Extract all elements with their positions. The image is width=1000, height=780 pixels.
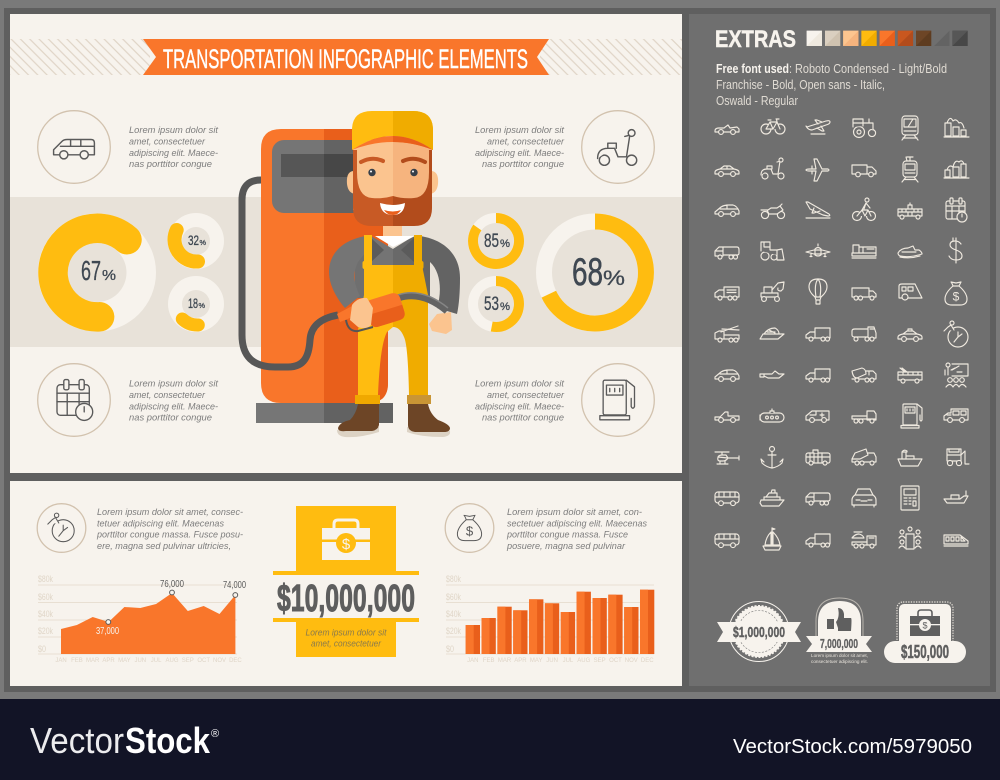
bar chart: SEP xyxy=(594,658,606,664)
bar chart: JUN xyxy=(546,658,558,664)
bar chart: $20k xyxy=(446,626,461,636)
text: chart intro right: posuere, magna sed pulvinar xyxy=(506,541,626,551)
icon: fuel pump in circle xyxy=(582,364,654,436)
shirt and arms xyxy=(329,236,460,314)
icon: van in circle xyxy=(38,111,110,183)
panel: bottom charts xyxy=(10,481,682,686)
logo: VectorStock: Stock xyxy=(125,720,211,761)
text: bottom left lorem: nas porttitor congue xyxy=(129,412,212,422)
icon: fuel pump xyxy=(901,404,922,428)
text: top left lorem: nas porttitor congue xyxy=(129,159,212,169)
badge: 7,000,000 thumbs up: 7,000,000 xyxy=(820,636,858,651)
icon: chart up xyxy=(944,161,969,178)
area chart: $60k xyxy=(38,592,53,602)
area chart: $0 xyxy=(38,644,46,654)
area chart: 37,000 xyxy=(96,626,119,637)
bar chart: JUL xyxy=(563,658,574,664)
icon: jet ski xyxy=(898,246,922,258)
area chart: 74,000 xyxy=(223,580,246,591)
icon: semi truck xyxy=(806,328,830,341)
icon: calendar in circle xyxy=(38,364,110,436)
text: top right lorem: nas porttitor congue xyxy=(482,159,564,169)
icon: car front xyxy=(852,489,876,507)
colour swatches xyxy=(807,31,968,46)
icon: bus xyxy=(715,492,739,506)
area chart: $20k xyxy=(38,626,53,636)
text: bottom right lorem: nas porttitor congue xyxy=(482,412,564,422)
text: bottom right lorem: amet, consectetuer xyxy=(487,390,565,400)
icon: plane take-off xyxy=(806,120,830,134)
text: callout lorem xyxy=(306,628,387,648)
area chart: JUN xyxy=(134,658,146,664)
text: chart intro left xyxy=(96,507,243,551)
illustration: gas station attendant xyxy=(329,111,460,437)
text: top left lorem xyxy=(129,125,218,169)
text: chart intro left: ere, magna sed pulvinar ultricies, xyxy=(97,541,231,551)
icon: coach xyxy=(715,534,739,548)
text: chart intro right: porttitor congue massa. Fusce xyxy=(506,530,628,540)
area chart xyxy=(38,574,246,664)
text: bottom left lorem: Lorem ipsum dolor sit xyxy=(129,378,218,388)
text: badge caption: consectetuer adipiscing elit. xyxy=(811,659,868,664)
panel: main transportation poster xyxy=(10,14,682,473)
icon: scooter xyxy=(761,158,784,179)
icon: locomotive xyxy=(852,245,876,258)
area chart: $80k xyxy=(38,574,53,584)
icon: taxi xyxy=(898,329,922,341)
icon: tanker truck xyxy=(715,247,739,259)
badge: $150,000 briefcase: $ xyxy=(922,620,928,630)
overalls xyxy=(355,235,431,404)
bar chart: OCT xyxy=(609,658,622,664)
panel: extras xyxy=(689,14,990,686)
text: bottom right lorem: adipiscing elit. Maece- xyxy=(475,402,564,412)
text: top left lorem: amet, consectetuer xyxy=(129,136,206,146)
icon: dollar xyxy=(949,238,962,263)
bar chart: NOV xyxy=(625,658,638,664)
icon: cruise ship xyxy=(760,490,784,506)
area chart: DEC xyxy=(229,658,242,664)
icon: minivan xyxy=(715,370,739,381)
area chart: JAN xyxy=(55,658,67,664)
icon: city bus xyxy=(898,203,922,219)
donut: 85%: % xyxy=(500,238,510,250)
icon: money bag xyxy=(945,282,967,305)
icon: motorbike xyxy=(761,204,785,219)
logo: VectorStock: ® xyxy=(211,728,219,740)
icon: running clock in circle xyxy=(37,504,86,552)
donut: 32%: 32 xyxy=(188,232,199,248)
text: bottom left lorem: adipiscing elit. Maece- xyxy=(129,402,218,412)
icon: tram xyxy=(902,157,918,182)
donut: 68%: 68 xyxy=(572,251,603,294)
icon: convertible xyxy=(715,125,739,134)
icon: briefcase: $ xyxy=(342,536,351,553)
footer bar xyxy=(0,699,1000,780)
badge: $150,000 briefcase xyxy=(884,602,966,663)
icon: running clock xyxy=(944,321,968,347)
donut: 67% xyxy=(38,214,156,332)
donut: 68% xyxy=(544,222,646,324)
icon: flatbed xyxy=(852,411,876,423)
icon: helicopter xyxy=(715,452,739,464)
text: fonts used xyxy=(716,62,947,108)
bar chart: FEB xyxy=(483,658,495,664)
text: chart intro left: porttitor congue massa. Fusce posu- xyxy=(96,530,243,540)
donut: 53%: % xyxy=(500,301,510,313)
icon: container truck xyxy=(806,369,830,382)
text: fonts used: Franchise - Bold, Open sans - Italic, xyxy=(716,78,885,92)
icon: meeting xyxy=(899,527,921,549)
text: chart intro right: Lorem ipsum dolor sit amet, con- xyxy=(507,507,642,517)
icon: hot air balloon xyxy=(809,279,827,304)
text: chart intro right: sectetuer adipiscing elit. Maecenas xyxy=(507,518,647,528)
icon: bicycle xyxy=(761,119,785,134)
area chart: SEP xyxy=(182,658,194,664)
icon: yacht xyxy=(760,328,784,339)
icon: car carrier xyxy=(852,532,876,548)
heading: extras: EXTRAS xyxy=(715,26,796,53)
bar chart xyxy=(446,574,654,664)
icon: forklift xyxy=(947,449,969,466)
icon: caravan xyxy=(899,284,922,300)
text: badge caption: Lorem ipsum dolor sit amet, xyxy=(811,653,868,658)
text: chart intro left: tetuer adipiscing elit. Maecenas xyxy=(97,518,224,528)
donut: 67%: % xyxy=(102,267,116,284)
bar chart: $40k xyxy=(446,609,461,619)
bar chart: $80k xyxy=(446,574,461,584)
icon: tank truck xyxy=(852,327,876,341)
badge: $150,000 briefcase: $150,000 xyxy=(901,642,949,662)
text: bottom left lorem: amet, consectetuer xyxy=(129,390,206,400)
bar chart: APR xyxy=(514,658,527,664)
donut: 18% xyxy=(168,276,224,332)
text: bottom right lorem: Lorem ipsum dolor sit xyxy=(475,378,564,388)
icon: cargo ship xyxy=(898,450,922,466)
donut: 85% xyxy=(473,218,519,264)
icon: cyclist xyxy=(852,198,876,220)
icon: submarine xyxy=(760,409,784,422)
donut: 32% xyxy=(168,213,224,269)
text: fonts used: : Roboto Condensed - Light/Bold xyxy=(789,62,947,76)
text: top right lorem xyxy=(475,125,565,169)
donut: 53%: 53 xyxy=(484,293,499,315)
text: top right lorem: adipiscing elit. Maece- xyxy=(475,148,564,158)
icon: ambulance xyxy=(806,411,829,422)
bar chart: MAR xyxy=(498,658,512,664)
text: chart intro left: Lorem ipsum dolor sit amet, consec- xyxy=(97,507,243,517)
text: top right lorem: amet, consectetuer xyxy=(487,136,565,146)
bar chart: DEC xyxy=(641,658,654,664)
icon: fire truck xyxy=(715,326,739,342)
icon: ferry xyxy=(944,491,968,503)
icon: calendar xyxy=(946,198,967,222)
bar chart: JAN xyxy=(467,658,478,664)
text: fonts used: Free font used xyxy=(716,62,789,76)
icon: box truck xyxy=(715,287,739,300)
icon: bullet train xyxy=(944,535,968,546)
icon: truck xyxy=(806,534,830,547)
text: bottom left lorem xyxy=(129,378,218,422)
icon: motorhome xyxy=(944,409,968,422)
text: badge caption xyxy=(811,653,868,664)
icon: bulldozer xyxy=(761,242,784,260)
area chart: JUL xyxy=(151,658,162,664)
icon: scooter in circle xyxy=(582,111,654,183)
area chart: OCT xyxy=(197,658,210,664)
area chart: NOV xyxy=(213,658,226,664)
donut: 85%: 85 xyxy=(484,230,499,252)
icon: sailboat xyxy=(763,528,781,550)
icon: briefcase xyxy=(322,520,370,560)
bar chart: $60k xyxy=(446,592,461,602)
hatch pattern left and right of banner xyxy=(10,39,682,75)
icon grid: transport line icons xyxy=(715,116,969,550)
icon: chart down xyxy=(944,118,969,137)
badge: 7,000,000 thumbs up xyxy=(806,598,872,664)
callout: $10,000,000 xyxy=(273,506,419,657)
area chart: FEB xyxy=(71,658,83,664)
donut: 68%: % xyxy=(603,267,625,290)
icon: delivery van xyxy=(852,165,876,177)
icon: calculator xyxy=(901,486,919,510)
area chart: $40k xyxy=(38,609,53,619)
icon: plane top view xyxy=(806,159,829,181)
nozzle and hands xyxy=(337,291,452,334)
boots xyxy=(337,404,450,437)
icon: plane front xyxy=(806,244,830,256)
donut: 53% xyxy=(473,281,519,327)
text: top left lorem: Lorem ipsum dolor sit xyxy=(129,125,218,135)
icon: fire bus xyxy=(806,450,830,465)
donut: 32%: % xyxy=(200,238,206,247)
donut: 18%: % xyxy=(198,301,205,310)
icon: train front xyxy=(902,116,918,140)
badge: $1,000,000: $1,000,000 xyxy=(733,625,785,641)
icon: cement mixer xyxy=(852,368,876,382)
band behind donuts xyxy=(10,197,682,347)
icon: presentation xyxy=(945,363,968,387)
icon: excavator xyxy=(761,282,784,301)
text: fonts used: Oswald - Regular xyxy=(716,94,798,108)
area chart: MAY xyxy=(118,658,131,664)
icon: plane landing xyxy=(806,202,830,218)
area chart: MAR xyxy=(86,658,100,664)
text: top right lorem: Lorem ipsum dolor sit xyxy=(475,125,564,135)
icon: pickup xyxy=(715,412,739,422)
area chart: APR xyxy=(102,658,115,664)
bar chart: MAY xyxy=(530,658,542,664)
callout: $10,000,000: $10,000,000 xyxy=(277,578,415,620)
text: bottom right lorem xyxy=(475,378,565,422)
icon: van xyxy=(715,205,739,216)
icon: trolley bus xyxy=(898,368,922,383)
donut: 67%: 67 xyxy=(81,255,101,286)
text: top left lorem: adipiscing elit. Maece- xyxy=(129,148,218,158)
head xyxy=(352,111,433,226)
title: TRANSPORTATION INFOGRAPHIC ELEMENTS xyxy=(163,44,528,74)
donut: 18%: 18 xyxy=(188,295,198,311)
url: image id: VectorStock.com/5979050 xyxy=(733,736,972,758)
icon: anchor xyxy=(761,446,783,468)
text: callout lorem: amet, consectetuer xyxy=(311,638,382,648)
icon: car xyxy=(715,166,739,176)
icon: tractor xyxy=(853,119,876,138)
area chart: 76,000 xyxy=(160,579,184,590)
bar chart: AUG xyxy=(577,658,591,664)
bar chart: $0 xyxy=(446,644,454,654)
text: chart intro right xyxy=(506,507,647,551)
illustration: hose xyxy=(242,180,338,367)
logo: VectorStock: Vector xyxy=(30,720,124,761)
icon: dump truck xyxy=(852,449,876,465)
icon: speedboat xyxy=(760,371,784,378)
illustration: fuel pump xyxy=(256,129,393,423)
area chart: AUG xyxy=(165,658,179,664)
icon: tanker xyxy=(806,493,830,505)
logo: VectorStock xyxy=(30,720,219,761)
badge: $1,000,000 xyxy=(717,602,801,662)
icon: lorry xyxy=(852,288,876,300)
title banner xyxy=(143,39,549,75)
text: callout lorem: Lorem ipsum dolor sit xyxy=(306,628,387,638)
ears xyxy=(347,171,438,194)
icon: money bag in circle xyxy=(445,504,494,552)
